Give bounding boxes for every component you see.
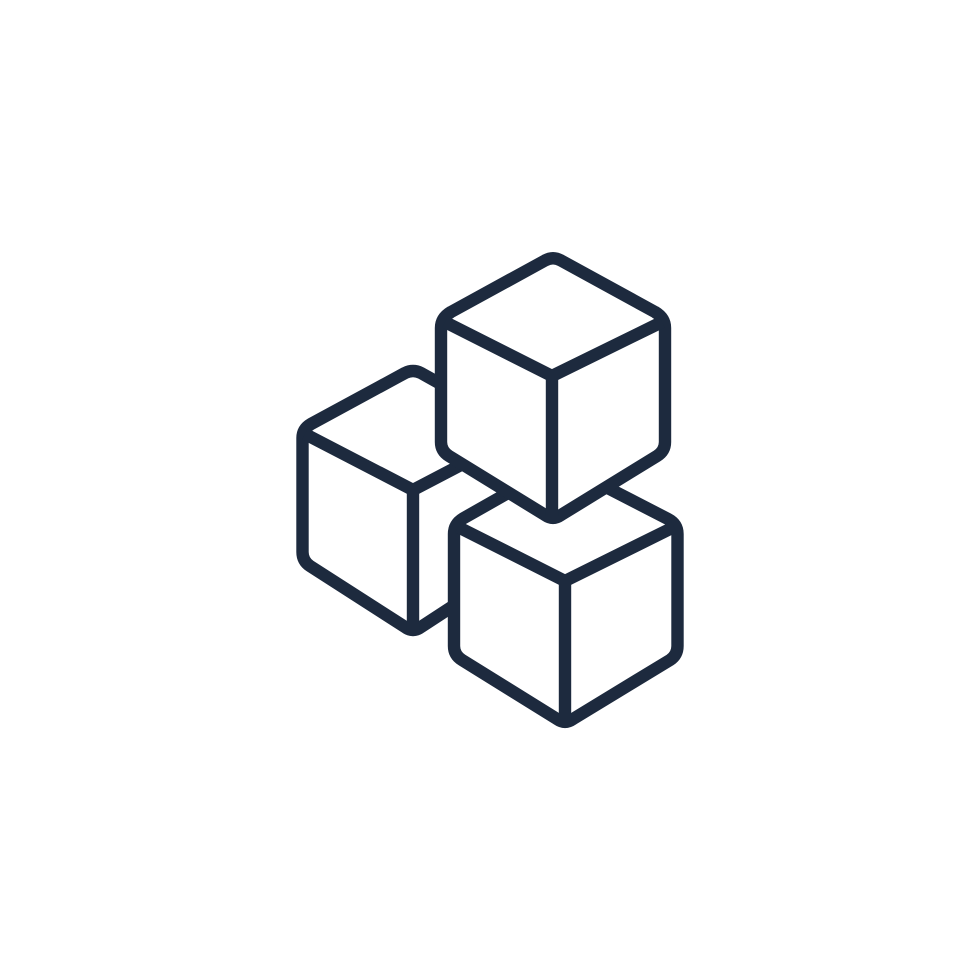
top cube xyxy=(441,258,665,518)
bottom cube xyxy=(454,484,678,722)
left cube xyxy=(302,371,480,630)
